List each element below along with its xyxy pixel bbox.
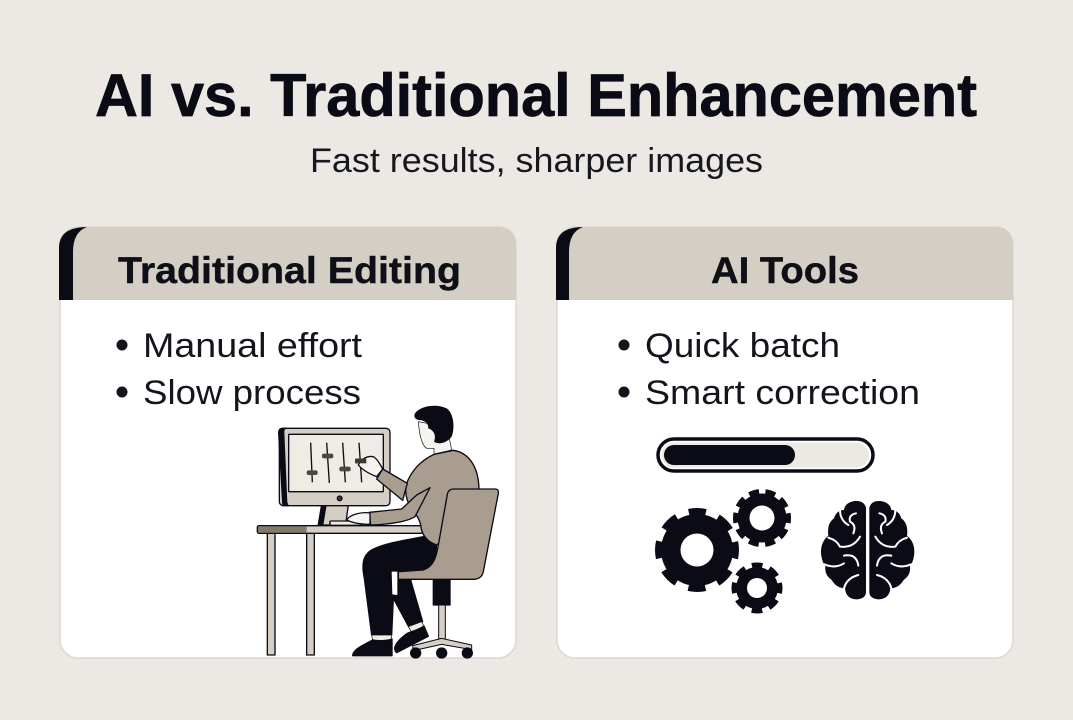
- bullet list: Manual effort: [143, 327, 363, 365]
- subtitle: Fast results, sharper images: [310, 142, 763, 180]
- illustration: person at desk editing on computer: [257, 406, 498, 658]
- panel: AI tools: [556, 227, 1013, 658]
- torso: [406, 450, 480, 545]
- icon: large gear: [659, 512, 735, 588]
- pointing hand: [358, 456, 383, 477]
- bullet list: Smart correction: [645, 374, 920, 412]
- left hemisphere: [821, 501, 866, 599]
- panel heading: AI Tools: [711, 250, 859, 291]
- icon: small upper gear: [736, 492, 788, 544]
- bullet list: [618, 327, 920, 412]
- title: AI vs. Traditional Enhancement: [95, 62, 977, 129]
- bullet list: Slow process: [143, 374, 361, 412]
- icon: brain: [821, 501, 914, 599]
- legs: [363, 537, 437, 635]
- office chair: [398, 489, 498, 658]
- lower hand: [347, 513, 370, 524]
- icon: small lower gear: [734, 566, 780, 610]
- accent bar: [556, 227, 583, 300]
- neck and face: [418, 422, 452, 454]
- accent bar: [59, 227, 87, 300]
- person: [347, 406, 480, 656]
- right hemisphere: [869, 501, 914, 599]
- panel background: [557, 227, 1013, 658]
- progress bar: [658, 439, 873, 471]
- bullet list: Quick batch: [645, 327, 840, 365]
- lower arm: [369, 488, 430, 525]
- desk: [257, 526, 422, 655]
- panel heading: Traditional Editing: [118, 250, 461, 291]
- panel header band: [568, 227, 1013, 300]
- panel header band: [72, 227, 516, 300]
- socks: [372, 635, 392, 641]
- panel: traditional editing: [59, 227, 516, 658]
- bullet list: [116, 327, 363, 412]
- shoes: [353, 639, 392, 656]
- sliders on screen: [307, 443, 366, 483]
- monitor: [279, 428, 390, 525]
- hair: [414, 406, 453, 443]
- panel background: [60, 227, 516, 658]
- raised arm: [377, 469, 407, 500]
